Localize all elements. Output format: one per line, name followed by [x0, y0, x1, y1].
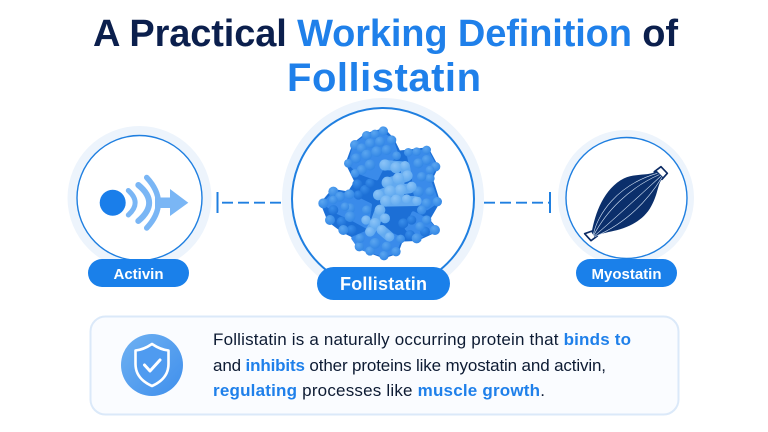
node: Activin — [68, 126, 212, 287]
icon: follistatin protein molecule — [318, 126, 442, 260]
label: Follistatin — [317, 267, 450, 300]
inhibition arrow: Follistatin to Myostatin — [484, 192, 550, 213]
title: Follistatin — [287, 56, 481, 100]
icon: muscle — [585, 167, 667, 241]
icon: activin signal arrow — [100, 178, 188, 228]
inhibition arrow: Follistatin to Activin — [218, 192, 283, 213]
definition text: regulating processes like muscle growth. — [213, 381, 545, 400]
definition text — [213, 330, 631, 400]
definition panel — [90, 316, 678, 414]
label: Follistatin: Follistatin — [340, 274, 427, 294]
label: Activin — [88, 259, 189, 287]
label: Myostatin: Myostatin — [592, 266, 662, 283]
definition text: and inhibits other proteins like myostatin and activin, — [213, 356, 606, 375]
node: Myostatin — [558, 130, 694, 287]
title: A Practical Working Definition of — [93, 13, 678, 55]
node: Follistatin — [282, 98, 484, 300]
title — [93, 13, 678, 100]
icon: shield with check — [121, 334, 183, 396]
definition text: Follistatin is a naturally occurring protein that binds to — [213, 330, 631, 349]
label: Activin: Activin — [114, 266, 164, 283]
label: Myostatin — [576, 259, 677, 287]
